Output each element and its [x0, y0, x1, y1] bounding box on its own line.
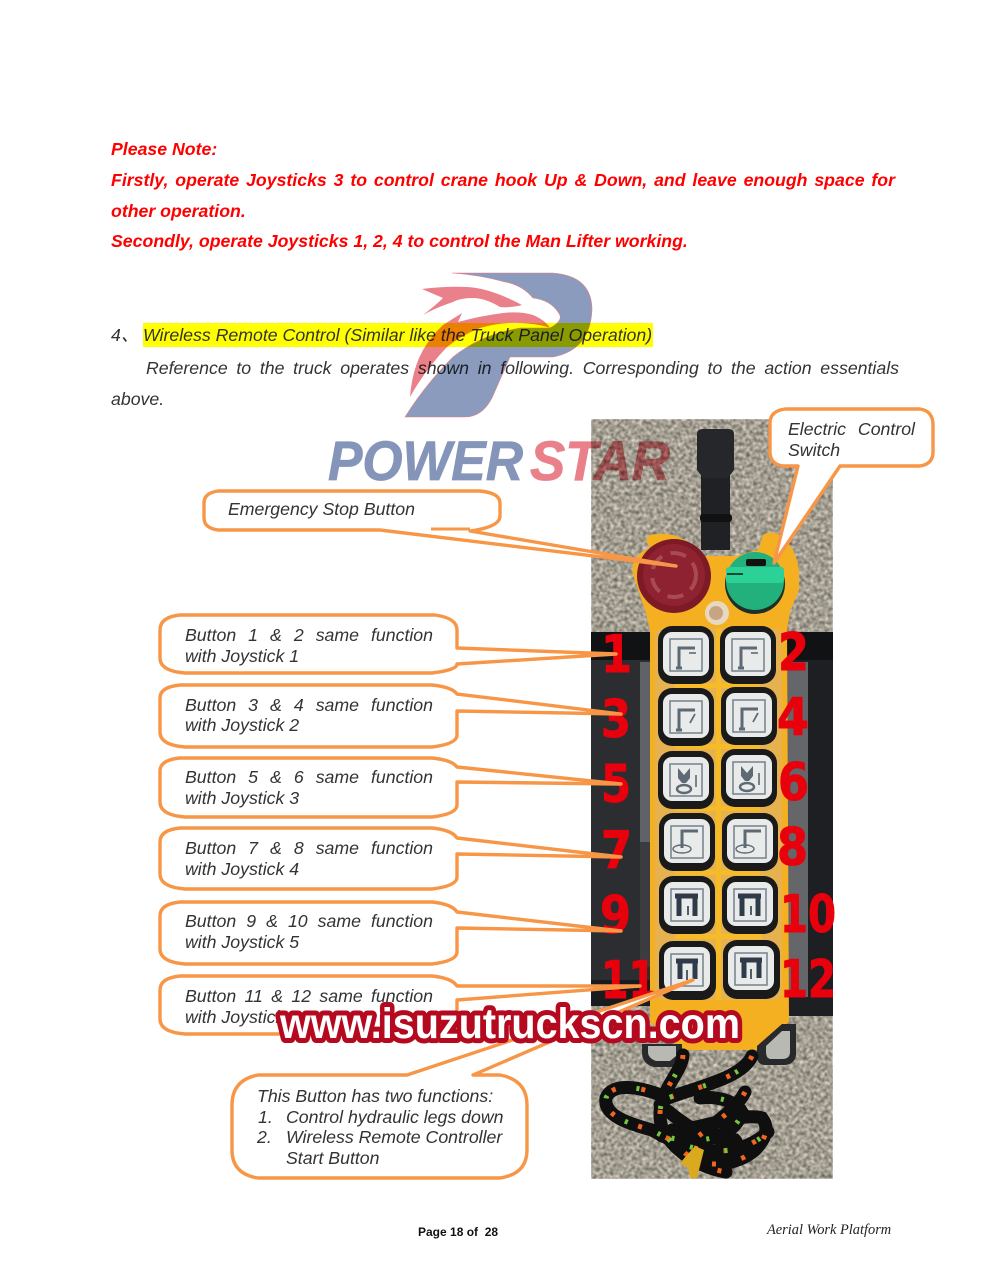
intro line 2: above.: [111, 389, 164, 409]
callout: buttons 5 and 6: with Joystick 3: [185, 788, 299, 808]
note line 1: Firstly, operate Joysticks 3 to control crane hook Up & Down, and leave enough space for: [111, 170, 895, 190]
note line 3: Secondly, operate Joysticks 1, 2, 4 to control the Man Lifter working.: [111, 231, 688, 251]
intro paragraph: [111, 358, 899, 409]
callout: buttons 1 and 2: [158, 613, 618, 675]
callout: electric control switch: [768, 407, 935, 565]
button 10: [722, 876, 778, 934]
button 4: [721, 687, 777, 745]
callout: buttons 5 and 6: Button 5 & 6 same function: [185, 767, 433, 787]
watermark url: www.isuzutruckscn.com: [279, 1000, 740, 1048]
logo P shape: [405, 273, 592, 417]
red button numbers: [600, 623, 836, 1011]
callout: buttons 7 and 8: Button 7 & 8 same function: [185, 838, 433, 858]
indicator lamp: [705, 601, 729, 625]
callout: start button with two functions: 1.: [258, 1107, 273, 1127]
button 7: [659, 813, 715, 871]
callout: buttons 3 and 4: [158, 683, 623, 749]
callout: buttons 7 and 8: with Joystick 4: [185, 859, 299, 879]
button 9: [659, 876, 715, 934]
red button numbers: 1: [601, 625, 632, 685]
logo wordmark: POWER: [328, 429, 524, 492]
button 3: [658, 688, 714, 746]
button 8: [722, 813, 778, 871]
callout: start button with two functions: [230, 978, 695, 1180]
button 11: [659, 941, 716, 1000]
intro line 1: Reference to the truck operates shown in following. Corresponding to the action essentials: [146, 358, 899, 378]
callout: buttons 9 and 10: with Joystick 5: [185, 932, 299, 952]
red button numbers: 5: [601, 755, 631, 815]
red button numbers: 10: [780, 885, 836, 945]
button 1: [658, 626, 714, 684]
note heading: Please Note:: [111, 139, 217, 159]
button 12: [723, 940, 780, 999]
callout: buttons 1 and 2: with Joystick 1: [185, 646, 299, 666]
red button numbers: 8: [777, 818, 808, 878]
concrete background: [591, 419, 833, 1179]
callout: start button with two functions: 2.: [257, 1127, 272, 1147]
button 6: [721, 749, 777, 807]
note: red instructions: [111, 139, 896, 251]
logo eagle swoosh: [410, 312, 550, 397]
callout: buttons 1 and 2: Button 1 & 2 same function: [185, 625, 433, 645]
red button numbers: 3: [601, 690, 631, 750]
corner plates: [642, 1024, 796, 1067]
rope: [606, 1055, 768, 1172]
highlighted heading text: Wireless Remote Control (Similar like the Truck Panel Operation): [143, 325, 652, 345]
logo eagle wing: [422, 287, 522, 315]
antenna: [697, 429, 734, 550]
black fabric pouch: [591, 632, 833, 1016]
section heading: wireless remote control: [111, 323, 653, 347]
red button numbers: 11: [601, 951, 656, 1011]
emergency stop button: [637, 539, 711, 613]
callout: emergency stop button: Emergency Stop Button: [228, 499, 415, 519]
logo wordmark: STAR: [530, 429, 671, 492]
red button numbers: 12: [780, 950, 836, 1010]
red button numbers: 9: [600, 886, 631, 946]
callout: start button with two functions: Start Button: [286, 1148, 380, 1168]
callout: buttons 3 and 4: with Joystick 2: [185, 715, 299, 735]
callout: buttons 5 and 6: [158, 756, 623, 819]
red button numbers: 4: [777, 688, 809, 748]
callout: start button with two functions: Control hydraulic legs down: [286, 1107, 503, 1127]
callout: start button with two functions: This Button has two functions:: [257, 1086, 493, 1106]
heading number: 4、: [111, 325, 139, 345]
red button numbers: 2: [778, 623, 809, 683]
callout: buttons 3 and 4: Button 3 & 4 same function: [185, 695, 433, 715]
footer document title: Aerial Work Platform: [767, 1222, 891, 1238]
callout: electric control switch: Electric Control: [788, 419, 915, 439]
button 2: [720, 626, 776, 684]
button 5: [658, 751, 714, 809]
callout: emergency stop button: [202, 489, 678, 568]
callout: buttons 11 and 12: [158, 974, 642, 1036]
note line 2: other operation.: [111, 201, 246, 221]
remote body: [633, 532, 799, 1050]
callout: buttons 9 and 10: [158, 900, 623, 966]
callout: buttons 7 and 8: [158, 826, 623, 891]
footer page number: Page 18 of 28: [418, 1225, 498, 1239]
green electric control switch: [725, 552, 785, 614]
red button numbers: 7: [601, 821, 632, 881]
callout: electric control switch: Switch: [788, 440, 840, 460]
callout: buttons 11 and 12: Button 11 & 12 same function: [185, 986, 433, 1006]
rope tassel: [680, 1146, 704, 1178]
callout: start button with two functions: Wireless Remote Controller: [286, 1127, 502, 1147]
logo wordmark: [328, 429, 671, 492]
callout: buttons 11 and 12: with Joystick 6: [185, 1007, 299, 1027]
red button numbers: 6: [778, 753, 809, 813]
callout: buttons 9 and 10: Button 9 & 10 same function: [185, 911, 433, 931]
